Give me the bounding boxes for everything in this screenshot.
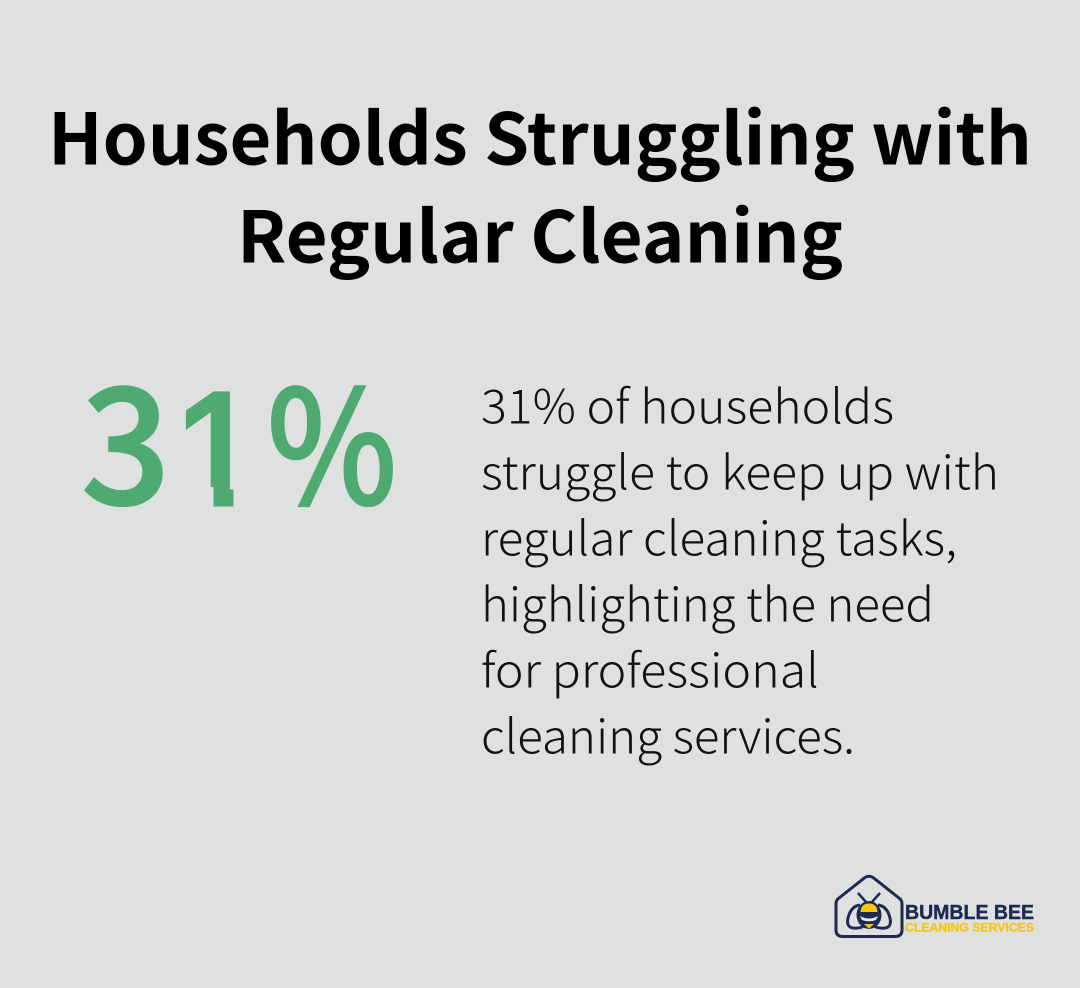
logo: Bumble Bee Cleaning Services [836, 876, 1034, 936]
title: Households Struggling with [48, 84, 1032, 186]
icon: bee [848, 893, 890, 929]
title: Regular Cleaning [237, 182, 843, 284]
big statistic: 31%: % [267, 323, 397, 550]
description text [481, 368, 999, 768]
description text: regular cleaning tasks, [481, 500, 957, 570]
big statistic: 31% [81, 323, 397, 550]
logo wordmark: BUMBLE BEE [905, 902, 1034, 924]
description text: struggle to keep up with [481, 434, 999, 504]
title [48, 84, 1032, 284]
description text: for professional [481, 632, 819, 702]
big statistic: 31%: 1 [173, 359, 262, 538]
logo tagline: CLEANING SERVICES [905, 920, 1034, 934]
description text: cleaning services. [481, 698, 855, 768]
icon: house outline [836, 876, 902, 936]
big statistic: 31%: 3 [81, 323, 170, 550]
description text: 31% of households [481, 368, 894, 438]
description text: highlighting the need [481, 566, 934, 636]
